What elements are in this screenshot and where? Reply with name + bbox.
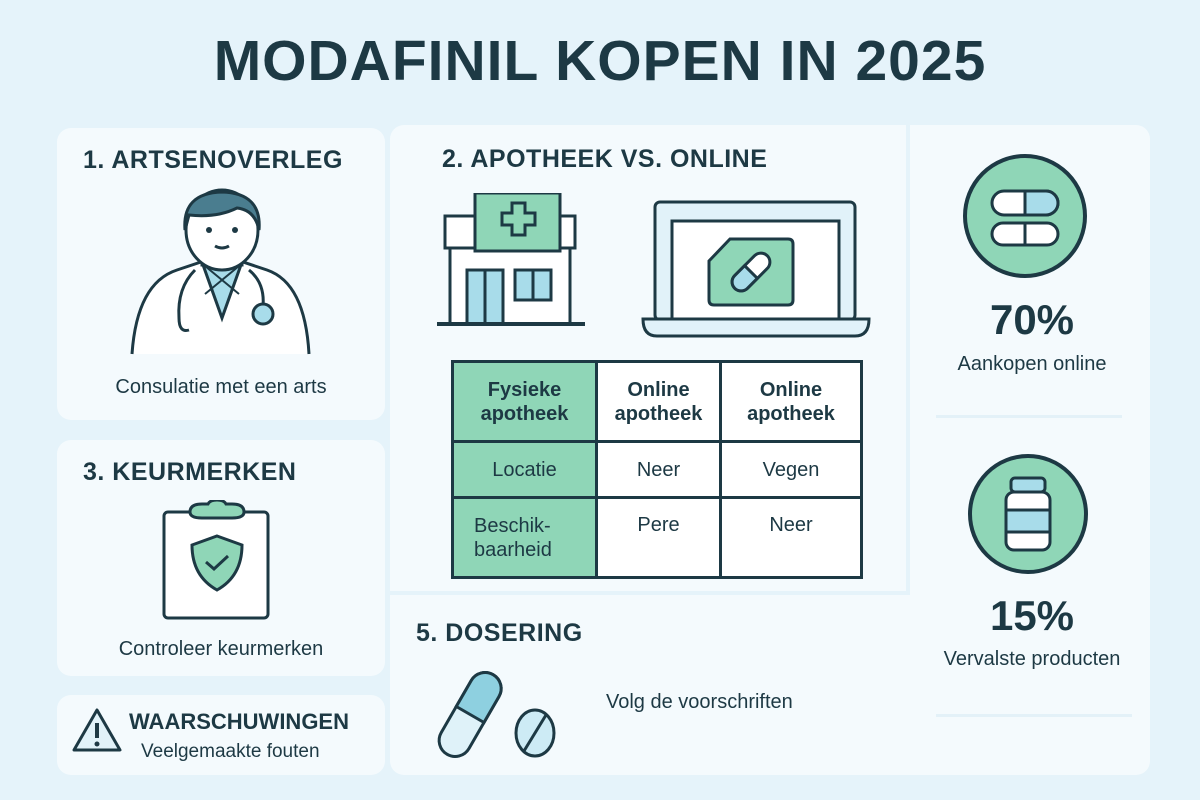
stat: 70% xyxy=(957,154,1106,375)
comparison table: baarheid xyxy=(474,538,552,560)
heading: WAARSCHUWINGEN xyxy=(129,709,349,734)
icon: clipboard shield xyxy=(162,500,270,620)
comparison table: apotheek xyxy=(747,402,835,424)
comparison table: apotheek xyxy=(481,402,568,424)
panel: waarschuwingen xyxy=(57,695,385,775)
sub-panel: stats xyxy=(936,154,1132,717)
text: Veelgemaakte fouten xyxy=(141,741,320,762)
number: 15% xyxy=(990,592,1074,639)
icon: doctor xyxy=(130,188,310,354)
comparison table: Online xyxy=(627,378,690,400)
caption: Controleer keurmerken xyxy=(119,638,323,660)
heading: 2. APOTHEEK VS. ONLINE xyxy=(442,145,767,173)
heading: 3. KEURMERKEN xyxy=(83,458,296,486)
heading: 5. DOSERING xyxy=(416,619,583,647)
icon: pills xyxy=(438,671,556,758)
comparison table xyxy=(451,360,863,579)
panel: artsenoverleg xyxy=(57,128,385,420)
comparison table: Fysieke xyxy=(488,378,561,400)
comparison table: Online xyxy=(760,378,822,400)
icon: warning xyxy=(72,708,122,752)
comparison table: Vegen xyxy=(763,458,819,480)
title: MODAFINIL KOPEN IN 2025 xyxy=(214,29,986,93)
label: Aankopen online xyxy=(957,353,1106,375)
sub-panel: dosering xyxy=(416,619,793,758)
icon: capsules circle xyxy=(963,154,1087,278)
icon: laptop xyxy=(642,200,870,338)
comparison table: Pere xyxy=(637,514,680,536)
panel: keurmerken xyxy=(57,440,385,676)
panel: main xyxy=(390,125,1150,775)
sub-panel: apotheek vs online xyxy=(390,125,910,595)
comparison table: Neer xyxy=(769,514,813,536)
icon: pharmacy building xyxy=(437,193,585,326)
number: 70% xyxy=(990,296,1074,343)
comparison table: Locatie xyxy=(492,458,557,480)
comparison table: apotheek xyxy=(615,402,702,424)
comparison table: Neer xyxy=(637,458,680,480)
comparison table: Beschik- xyxy=(474,514,551,536)
heading: 1. ARTSENOVERLEG xyxy=(83,146,343,174)
icon: bottle circle xyxy=(968,454,1088,574)
text: Volg de voorschriften xyxy=(606,691,793,713)
label: Vervalste producten xyxy=(944,648,1120,670)
caption: Consulatie met een arts xyxy=(115,376,327,398)
stat: 15% xyxy=(944,454,1120,670)
